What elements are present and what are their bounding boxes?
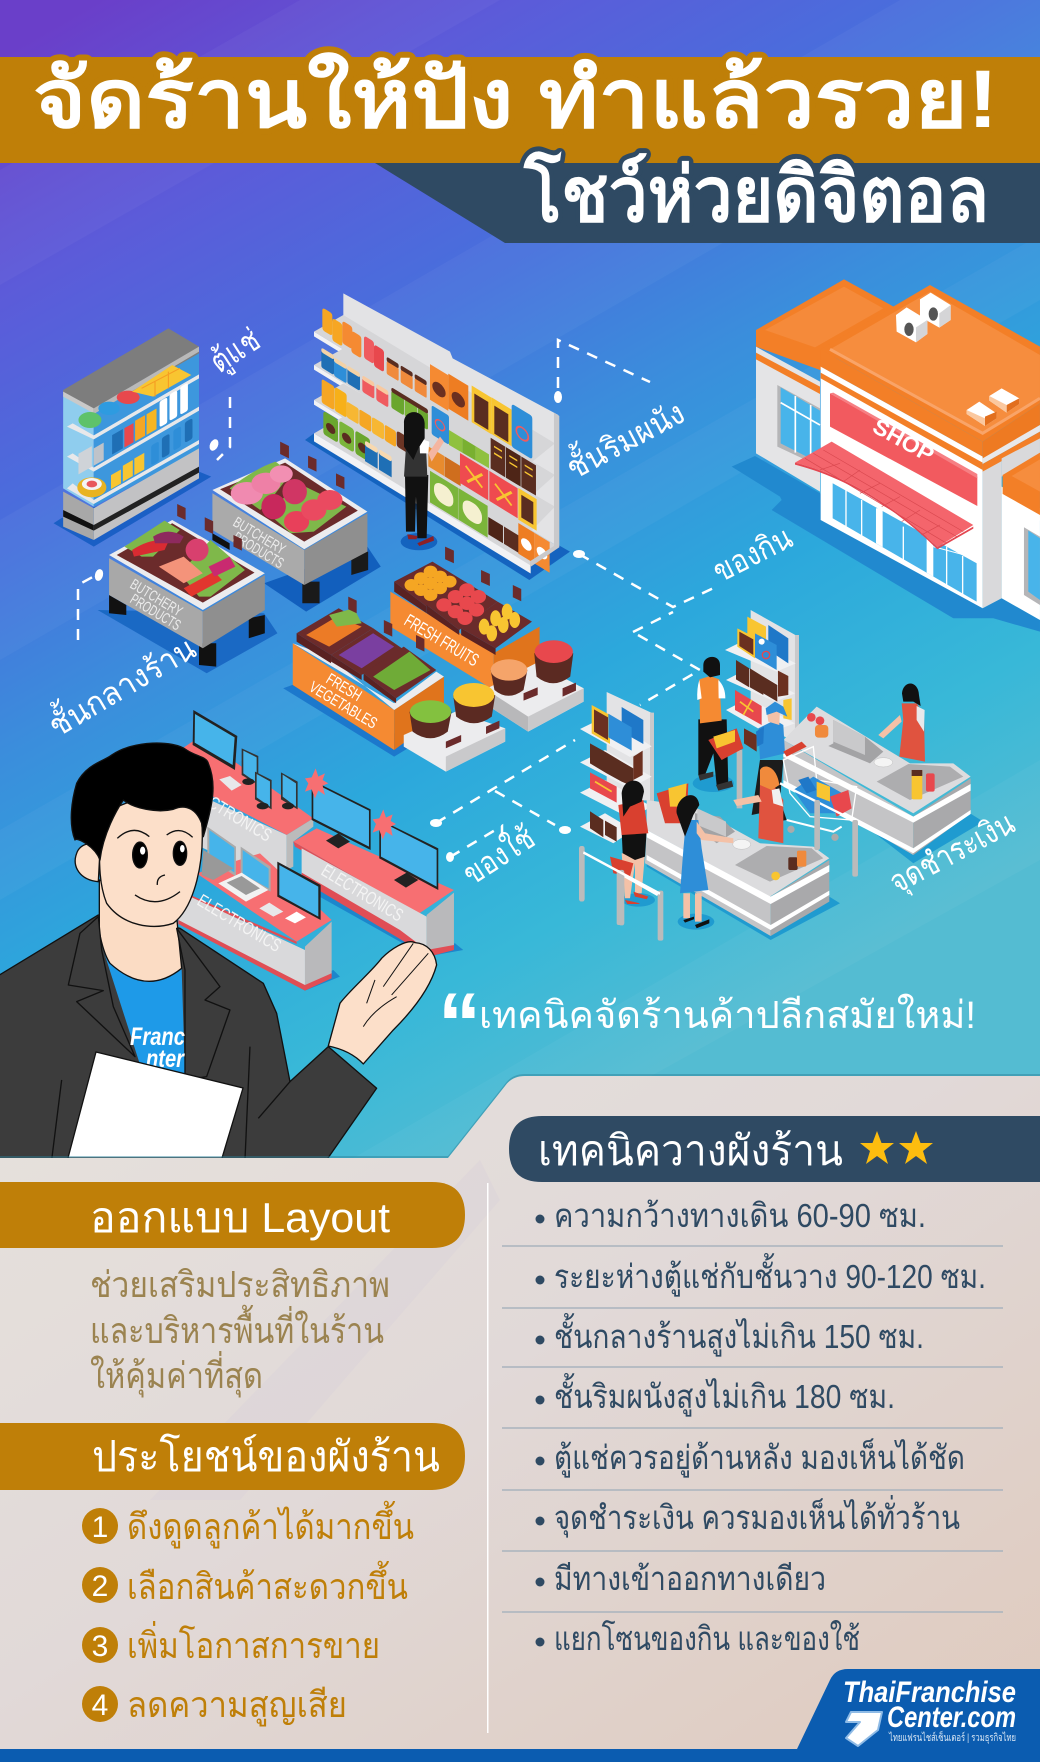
checkout scene [580,610,983,941]
counter back [783,707,971,855]
divider: vertical [487,1183,488,1733]
panel: layout design [0,1182,465,1248]
label: checkout: จุดชำระเงิน [883,804,1021,902]
leader dots [94,391,585,862]
price tags [177,442,521,652]
sleeve fold [52,1047,290,1160]
shirt logo text: nter [146,1045,185,1073]
front cashier [733,766,783,843]
title line 2: โชว์ห่วยดิจิตอล [523,150,989,238]
left shelf [580,692,654,843]
benefits list: 4 [92,1689,108,1722]
electronics tables [178,710,463,991]
electronics labels: ELECTRONICS [194,890,285,956]
benefits list: เพิ่มโอกาสการขาย [127,1621,380,1666]
layout tips list [502,1197,1003,1657]
electronics labels [194,792,407,956]
layout tips list: ชั้นกลางร้านสูงไม่เกิน 150 ซม. [554,1313,924,1357]
label: goods: ของใช้ [456,819,541,892]
butchery labels: PRODUCTS [127,591,184,634]
stall labels [306,610,482,733]
head [99,799,202,926]
benefits list: ลดความสูญเสีย [127,1684,347,1727]
freezer cabinet [54,328,211,547]
lapels [68,917,135,1057]
stall labels: FRESH FRUITS [401,610,482,670]
panel: benefits: ประโยชน์ของผังร้าน [92,1432,440,1480]
layout tips list: จุดชำระเงิน ควรมองเห็นได้ทั่วร้าน [554,1495,960,1538]
paper [68,1052,243,1158]
shelf 4 [314,398,558,585]
fruit stall [390,562,540,690]
shelf 1 [314,283,555,469]
benefits list: 1 [92,1511,108,1544]
ear [75,844,100,882]
butchery table front [98,520,277,673]
shirt logo text: Franc [130,1023,185,1051]
jacket [0,915,377,1160]
layout tips list: ชั้นริมผนังสูงไม่เกิน 180 ซม. [554,1373,895,1417]
queue stanchions [579,846,660,925]
label: centre shelf: ชั้นกลางร้าน [40,625,202,744]
shopping cart [780,747,857,841]
floor shadows [853,813,983,863]
electronics labels: CTRONICS [205,792,275,845]
character: presenter [0,743,437,1160]
back shelf [725,610,799,808]
counter front [645,783,829,936]
butchery labels: BUTCHERY [127,576,185,620]
neck [99,880,182,981]
stanchions [617,800,858,941]
butchery labels [127,514,288,634]
vegetable stall [283,608,444,757]
red top shopper [610,781,655,907]
panel: layout design: ออกแบบ Layout [90,1194,390,1241]
heading: layout technique [509,1116,1040,1182]
shelf 3 [314,363,555,540]
label: freezer: ตู้แช่ [203,321,268,382]
dashed leader lines [78,340,718,857]
heading: layout technique: เทคนิควางผังร้าน [538,1127,843,1174]
layout description: ให้คุ้มค่าที่สุด [90,1351,263,1398]
electronics labels: ELECTRONICS [318,860,407,925]
hair [71,743,213,860]
blue shirt shopper [752,702,807,822]
stall labels: FRESH [323,671,364,705]
stall labels: VEGETABLES [306,679,380,733]
layout tips list: ความกว้างทางเดิน 60-90 ซม. [554,1197,926,1234]
layout tips list: ตู้แช่ควรอยู่ด้านหลัง มองเห็นได้ชัด [554,1438,965,1478]
blue dress shopper [677,795,733,930]
layout description: และบริหารพื้นที่ในร้าน [90,1304,384,1351]
layout tips list: มีทางเข้าออกทางเดียว [554,1560,826,1597]
shopper at wall shelf [401,412,444,550]
shelf 2 [314,330,555,505]
wall shelf with products [305,283,570,585]
bottom info panel [0,1074,1040,1762]
title line 1: จัดร้านให้ปัง ทำแล้วรวย! [33,52,998,145]
benefits list: ดึงดูดลูกค้าได้มากขึ้น [127,1500,414,1549]
benefits list: 3 [92,1630,108,1663]
layout description: ช่วยเสริมประสิทธิภาพ [90,1264,390,1305]
fruit baskets on plinths [404,640,584,772]
shop sign text: SHOP [869,414,938,467]
benefits list: เลือกสินค้าสะดวกขึ้น [127,1560,408,1607]
footer bar and logo [0,1669,1040,1762]
butchery labels: PRODUCTS [230,529,287,572]
label: wall shelf: ชั้นริมผนัง [558,390,690,486]
shirt logo text [130,1023,185,1073]
quote text: เทคนิคจัดร้านค้าปลีกสมัยใหม่! [479,994,976,1037]
benefits list: 2 [92,1570,108,1603]
layout tips list: แยกโซนของกิน และของใช้ [554,1620,860,1657]
benefits list [82,1500,414,1727]
layout description [90,1264,390,1398]
icon: arrow [846,1712,882,1746]
monitors [193,710,438,923]
back cashier [878,684,925,762]
eyes [133,842,147,868]
hand [328,942,437,1064]
shirt [102,945,185,1075]
label: food: ของกิน [707,519,798,589]
butchery table back [212,458,381,612]
quote mark: “ [438,976,481,1072]
panel: benefits [0,1423,465,1490]
shop building [732,279,1040,632]
title banner [0,52,1040,243]
orange vest man [693,657,743,792]
butchery labels: BUTCHERY [230,514,288,558]
icon: stars [860,1131,933,1164]
